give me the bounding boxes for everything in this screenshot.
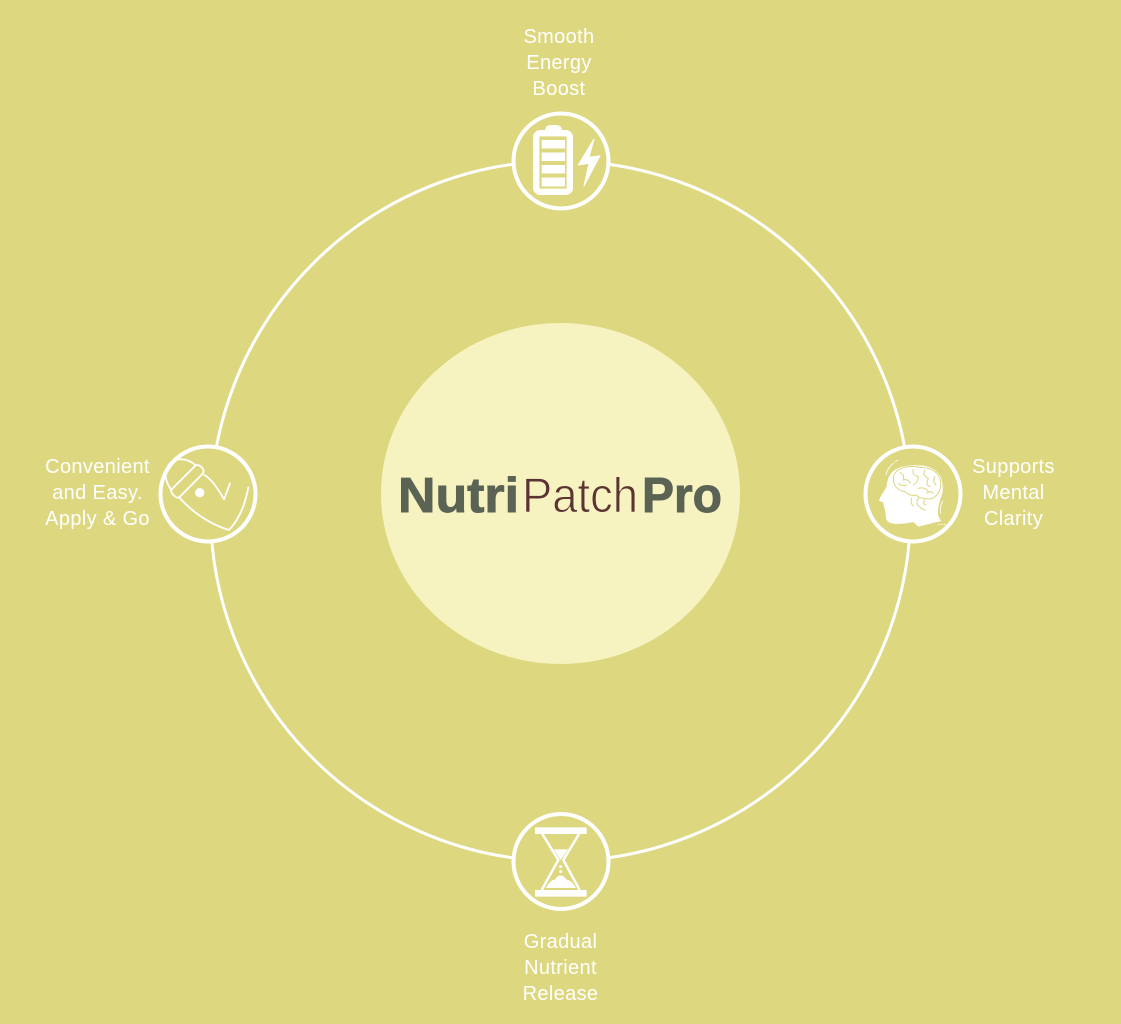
icon: battery with lightning bolt	[514, 114, 608, 208]
label: smooth energy boost: Smooth	[523, 26, 595, 48]
icon: patch on arm	[160, 446, 256, 542]
benefit: supports mental clarity	[866, 446, 1055, 542]
label: smooth energy boost: Energy	[526, 52, 592, 74]
benefit: gradual nutrient release	[514, 814, 608, 1005]
label: supports mental clarity: Supports	[972, 456, 1055, 478]
label: smooth energy boost: Boost	[533, 78, 586, 100]
benefit: convenient and easy	[45, 446, 256, 542]
benefit: smooth energy boost	[514, 26, 608, 208]
label: gradual nutrient release: Release	[523, 983, 598, 1005]
label: convenient and easy: Convenient	[45, 456, 150, 478]
logo wordmark	[398, 469, 722, 523]
label: supports mental clarity: Mental	[982, 482, 1045, 504]
label: convenient and easy: and Easy.	[52, 482, 143, 504]
central ellipse with logo	[381, 323, 740, 664]
ring connecting the benefits	[210, 161, 910, 861]
logo wordmark: Patch	[522, 469, 638, 523]
icon: hourglass	[514, 814, 608, 909]
label: gradual nutrient release: Gradual	[524, 931, 597, 953]
logo wordmark: Nutri	[398, 469, 519, 523]
label: supports mental clarity: Clarity	[984, 508, 1043, 530]
icon: head with brain	[866, 446, 960, 542]
label: gradual nutrient release: Nutrient	[524, 957, 597, 979]
label: convenient and easy: Apply & Go	[45, 508, 150, 530]
logo wordmark: Pro	[642, 469, 722, 523]
